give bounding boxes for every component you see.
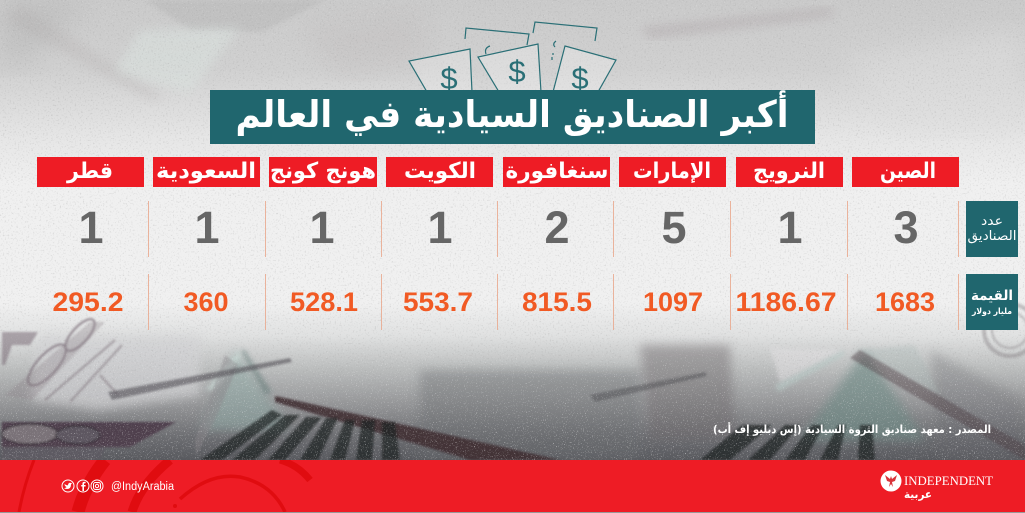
social handle: @IndyArabia (111, 481, 175, 493)
icon: dollar bills: $ (440, 61, 458, 96)
row label: number of funds (966, 201, 1018, 257)
header: Norway: النرويج (753, 159, 825, 184)
background: dark diagonal streaks (108, 350, 1025, 460)
footer bar (0, 460, 1025, 513)
logo: Independent Arabia: INDEPENDENT (904, 474, 993, 488)
header: UAE: الإمارات (633, 159, 711, 184)
header: Qatar (37, 157, 144, 187)
title banner: أكبر الصناديق السيادية في العالم (236, 90, 788, 136)
row label: value: القيمة (971, 288, 1013, 304)
background: soft lower tone blocks (30, 340, 1025, 441)
background: striped pyramid base (200, 410, 875, 460)
header: Qatar: قطر (66, 159, 113, 184)
row: fund value per country: 815.5 (522, 287, 592, 317)
row: fund value per country: 360 (183, 287, 229, 317)
icon: dollar bills: $ (571, 61, 589, 96)
row: number of funds per country: 2 (544, 202, 570, 253)
header: UAE (619, 157, 726, 187)
column dividers (148, 201, 958, 330)
row: number of funds per country: 1 (777, 202, 803, 253)
row label: value: مليار دولار (971, 307, 1012, 317)
logo: Independent Arabia (880, 470, 993, 501)
header: Kuwait (386, 157, 493, 187)
row: number of funds per country: 1 (78, 202, 104, 253)
icon: dollar bills: $ (508, 54, 526, 89)
row: number of funds per country: 1 (427, 202, 453, 253)
row: number of funds per country: 1 (194, 202, 220, 253)
row: number of funds per country (78, 202, 919, 253)
row: fund value per country: 1683 (875, 287, 935, 317)
background: left banknotes (2, 315, 122, 402)
source note: المصدر : معهد صناديق الثروة السيادية (إس دبليو إف أب) (713, 422, 991, 436)
row: fund value per country: 528.1 (290, 287, 358, 317)
header: Norway (736, 157, 843, 187)
icon: facebook (77, 480, 89, 492)
row: fund value per country: 553.7 (403, 287, 473, 317)
header: Kuwait: الكويت (404, 159, 476, 184)
logo: Independent Arabia: عربية (904, 488, 932, 501)
header: China (852, 157, 959, 187)
row: fund value per country: 1186.67 (736, 287, 836, 317)
header: Hong Kong: هونج كونج (270, 159, 376, 184)
social icons (62, 480, 103, 492)
row label: number of funds: عدد (981, 214, 1003, 229)
row: fund value per country: 295.2 (52, 287, 124, 317)
icon: dollar bills (409, 22, 616, 96)
row: number of funds per country: 5 (661, 202, 687, 253)
header: China: الصين (880, 159, 936, 184)
header: Saudi Arabia: السعودية (156, 159, 256, 184)
background: top faded banknote forms (4, 2, 1008, 94)
row: number of funds per country: 1 (309, 202, 335, 253)
country headers (37, 157, 959, 187)
background: dark banknote band (2, 355, 238, 460)
background: pale pyramid facets (205, 345, 940, 395)
row label: value (966, 274, 1018, 330)
icon: instagram (91, 480, 103, 492)
icon: twitter (62, 480, 74, 492)
row: fund value per country: 1097 (643, 287, 703, 317)
row: number of funds per country: 3 (893, 202, 919, 253)
row label: number of funds: الصناديق (968, 229, 1016, 244)
row: fund value per country (52, 287, 935, 317)
header: Singapore: سنغافورة (506, 159, 608, 184)
background: seal at right (984, 304, 1025, 356)
